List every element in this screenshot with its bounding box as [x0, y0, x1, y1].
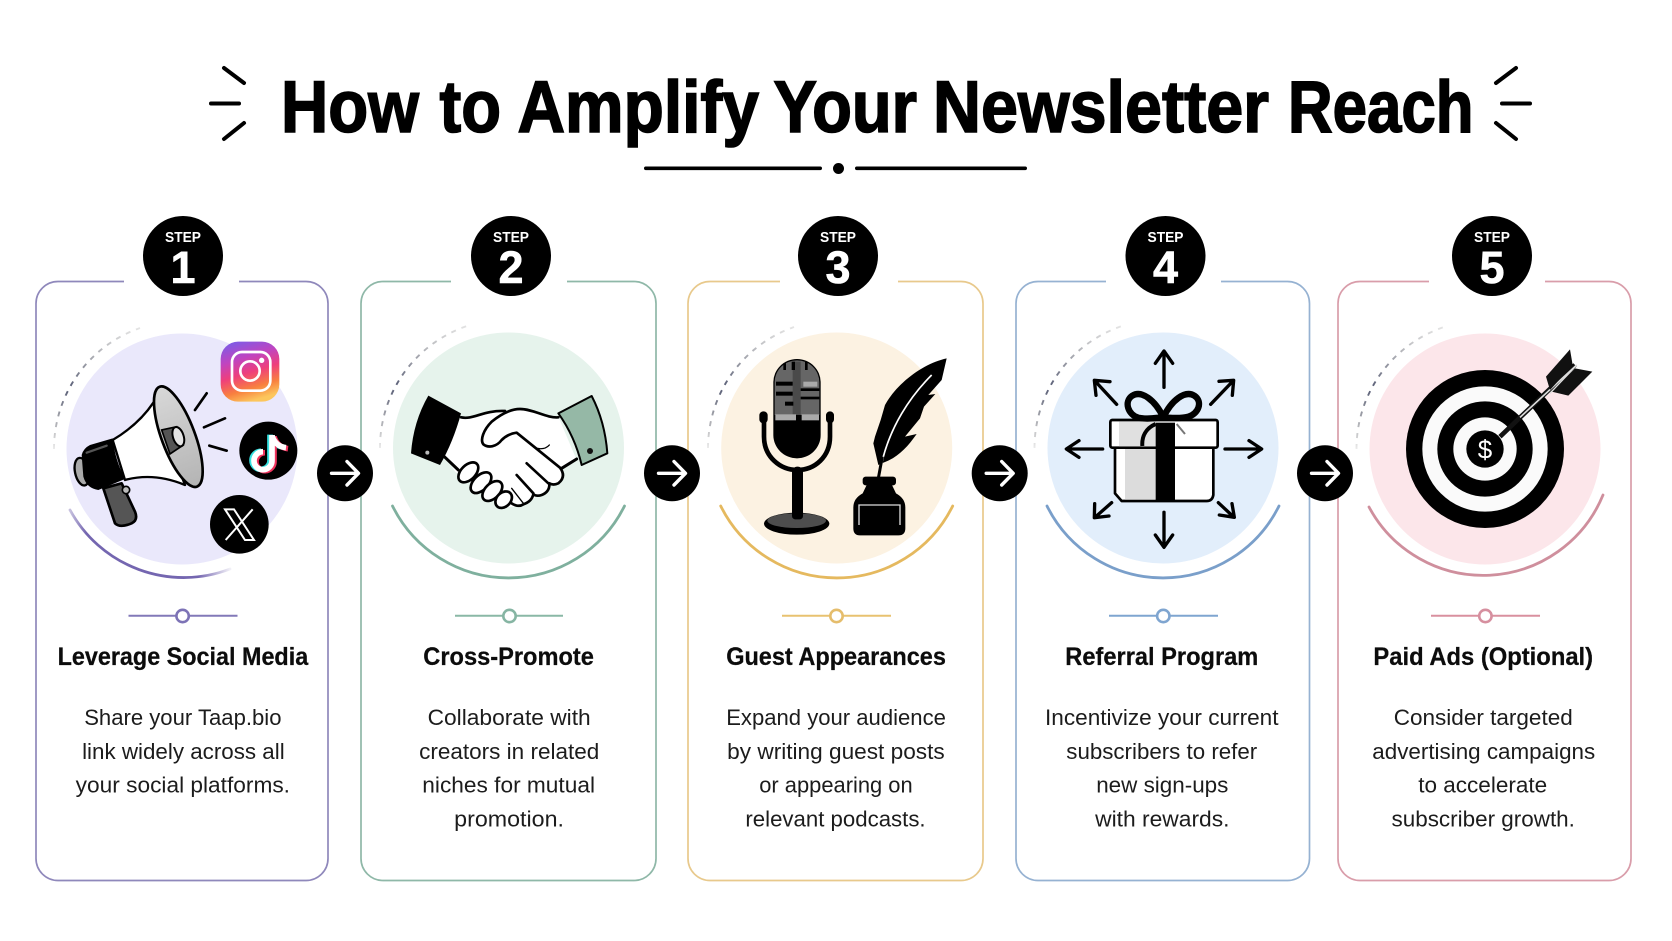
step badge 3 — [798, 216, 878, 296]
icon: gift with arrows — [1066, 351, 1262, 547]
body text 2: Collaborate with — [428, 705, 591, 730]
body text 5: Consider targeted — [1394, 705, 1573, 730]
arrow 4 to 5 — [1297, 445, 1353, 501]
step badge 1 — [143, 216, 223, 296]
arrow 3 to 4 — [972, 445, 1028, 501]
card outline 3 — [688, 282, 983, 880]
card outline 1 — [36, 282, 328, 880]
step badge 2: STEP — [493, 229, 529, 246]
divider 5 — [1431, 610, 1540, 622]
body text 3: relevant podcasts. — [745, 807, 926, 832]
title: How — [281, 67, 419, 148]
icon: quill and ink bottle — [853, 358, 947, 535]
title: Your — [774, 67, 917, 148]
body text 2: creators in related — [419, 739, 599, 764]
icon: microphone — [759, 359, 834, 535]
divider 4 — [1109, 610, 1218, 622]
divider 3 — [782, 610, 891, 622]
title — [281, 67, 1474, 148]
icon circle 4 — [1034, 326, 1279, 578]
icon: target with arrow: $ — [1478, 434, 1493, 464]
heading 2: Cross-Promote — [423, 643, 594, 671]
icon circle 1 — [54, 328, 298, 578]
body text 4: with rewards. — [1094, 807, 1230, 832]
body text 4 — [1045, 705, 1279, 832]
panel: step 3 — [688, 216, 983, 880]
title: Reach — [1288, 67, 1474, 148]
body text 1: your social platforms. — [76, 773, 290, 798]
icon: megaphone with social logos — [72, 342, 297, 554]
body text 3: Expand your audience — [726, 705, 946, 730]
panel: step 5 — [1338, 216, 1631, 880]
body text 2 — [419, 705, 599, 832]
icon: megaphone — [72, 381, 213, 526]
heading 4: Referral Program — [1065, 643, 1258, 671]
title underline — [644, 163, 1027, 174]
icon: instagram — [221, 342, 279, 402]
body text 1: Share your Taap.bio — [84, 705, 282, 730]
panel: step 4 — [1016, 216, 1310, 880]
title: Newsletter — [933, 67, 1269, 148]
body text 3 — [726, 705, 946, 832]
gift box — [1110, 394, 1218, 501]
body text 2: niches for mutual — [422, 773, 595, 798]
step badge 4: STEP — [1148, 229, 1184, 246]
body text 1: link widely across all — [82, 739, 285, 764]
body text 4: Incentivize your current — [1045, 705, 1279, 730]
body text 1 — [76, 705, 290, 798]
icon: target with arrow — [1406, 349, 1592, 528]
step badge 5 — [1452, 216, 1532, 296]
icon: handshake — [411, 396, 607, 511]
panel: step 2 — [361, 216, 656, 880]
divider 2 — [455, 610, 563, 622]
card outline 2 — [361, 282, 656, 880]
body text 5 — [1372, 705, 1595, 832]
heading 5: Paid Ads (Optional) — [1373, 643, 1593, 671]
step badge 5: 5 — [1479, 242, 1505, 293]
body text 3: by writing guest posts — [727, 739, 945, 764]
step badge 2: 2 — [498, 242, 524, 293]
step badge 3: 3 — [825, 242, 851, 293]
card outline 5 — [1338, 282, 1631, 880]
divider 1 — [128, 610, 238, 622]
body text 5: advertising campaigns — [1372, 739, 1595, 764]
step badge 4 — [1126, 216, 1206, 296]
step badge 1: 1 — [170, 242, 196, 293]
title sparks: left — [211, 68, 244, 139]
body text 4: subscribers to refer — [1066, 739, 1258, 764]
title sparks: right — [1496, 68, 1530, 139]
title: Amplify — [518, 67, 759, 148]
arrows radiating — [1066, 351, 1262, 547]
icon: sound lines — [195, 393, 227, 451]
step badge 1: STEP — [165, 229, 201, 246]
icon: microphone and quill — [759, 358, 947, 535]
heading 1: Leverage Social Media — [58, 643, 309, 671]
step badge 2 — [471, 216, 551, 296]
icon: x — [210, 495, 269, 554]
icon circle 3 — [708, 327, 953, 578]
heading 3: Guest Appearances — [726, 643, 946, 671]
step badge 3: STEP — [820, 229, 856, 246]
body text 3: or appearing on — [759, 773, 913, 798]
arrow 2 to 3 — [644, 445, 700, 501]
icon: tiktok — [239, 422, 297, 480]
title: to — [440, 67, 501, 148]
step badge 4: 4 — [1153, 242, 1178, 293]
icon circle 2 — [380, 325, 624, 578]
body text 4: new sign-ups — [1096, 773, 1228, 798]
body text 5: to accelerate — [1418, 773, 1547, 798]
card outline 4 — [1016, 282, 1310, 880]
step badge 5: STEP — [1474, 229, 1510, 246]
panel: step 1 — [36, 216, 328, 880]
icon circle 5 — [1356, 327, 1603, 575]
body text 2: promotion. — [454, 807, 564, 832]
arrow 1 to 2 — [317, 445, 373, 501]
body text 5: subscriber growth. — [1392, 807, 1575, 832]
